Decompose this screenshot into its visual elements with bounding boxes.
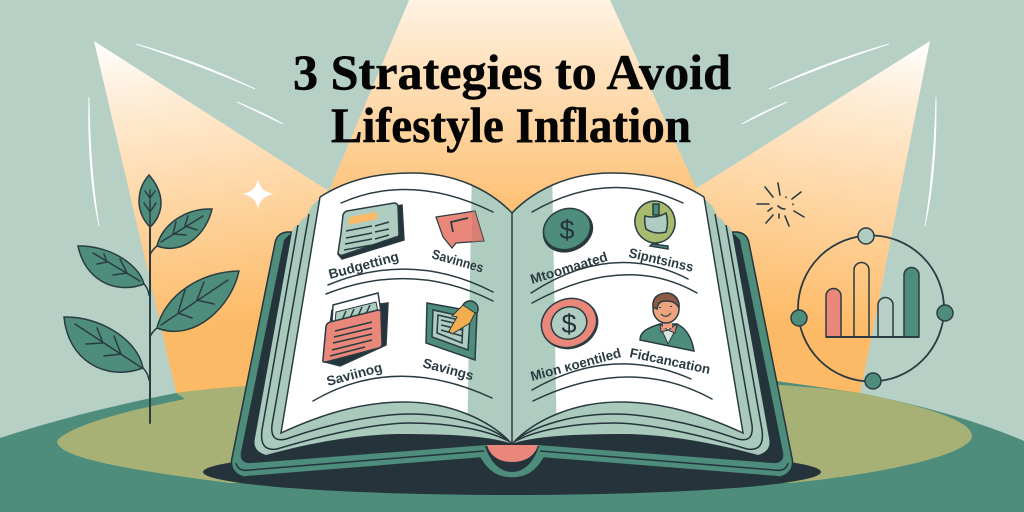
leaf: upper left: [78, 246, 144, 288]
icon: dollar ring: $: [561, 309, 577, 339]
right page: [512, 165, 743, 450]
label: Budgetting: Budgetting: [327, 249, 400, 282]
book cover: [231, 232, 793, 478]
label: Mion koentiled: Mion κoentiled: [529, 345, 623, 384]
page stack: left: [254, 200, 513, 455]
bar: salmon: [826, 288, 841, 337]
leaf: top: [139, 175, 161, 227]
chart baseline: [826, 336, 919, 338]
book: [231, 165, 793, 478]
spine hollow: [485, 446, 539, 472]
left page: [281, 165, 512, 450]
label: Fidcancation: Fidcancation: [628, 345, 712, 377]
leaf: lower right: [157, 271, 239, 331]
label: Savings: Savings: [421, 355, 475, 383]
label: Sipntsinss: Sipntsinss: [627, 245, 695, 275]
title line 2: Lifestyle Inflation: [331, 97, 691, 153]
bar: green: [904, 268, 919, 337]
node: top: [858, 228, 874, 244]
ground: dark green hill: [0, 370, 1024, 512]
label: Saviinog: Saviinog: [325, 360, 384, 389]
book shadow: [203, 449, 821, 495]
title: [293, 44, 731, 153]
icon: document with pencil: [426, 301, 478, 360]
node: left: [791, 310, 807, 326]
light ray: left: [94, 41, 420, 400]
leaf: lower left: [64, 317, 143, 372]
label: Savinnes: Savinnes: [430, 246, 485, 275]
bar chart in ring: [791, 228, 953, 389]
bar: outline tall: [854, 262, 869, 337]
icon: dollar coin: $: [559, 215, 575, 245]
light ray: centre: [300, 0, 720, 260]
icon: newspaper: [338, 203, 404, 259]
icon: advisor portrait: [640, 293, 694, 351]
label: Mtoomaated: Mtoomaated: [528, 249, 609, 287]
sparkle star: [242, 179, 274, 209]
node: bottom: [865, 373, 881, 389]
burst icon: [757, 183, 804, 226]
cover inner line: [236, 451, 788, 470]
white streaks: [89, 44, 936, 226]
ground: olive patch: [57, 378, 972, 483]
icon: monitor globe: [630, 197, 680, 249]
icon: salmon flag: [436, 211, 484, 248]
page labels: [325, 245, 712, 389]
icon: dollar ring: [534, 291, 605, 356]
bookmark: [487, 445, 538, 462]
bar: outline short: [878, 298, 893, 337]
node: right: [937, 305, 953, 321]
light ray: right: [610, 41, 930, 400]
page rules: [313, 187, 712, 401]
page stack: right: [511, 200, 770, 455]
title line 1: 3 Strategies to Avoid: [293, 44, 731, 100]
icon: red folder: [323, 293, 388, 366]
cover interior: [241, 232, 783, 463]
book gutter line: [511, 213, 513, 444]
icon: dollar coin: [537, 201, 599, 259]
leaf: upper right: [157, 209, 212, 248]
plant: [64, 175, 239, 423]
